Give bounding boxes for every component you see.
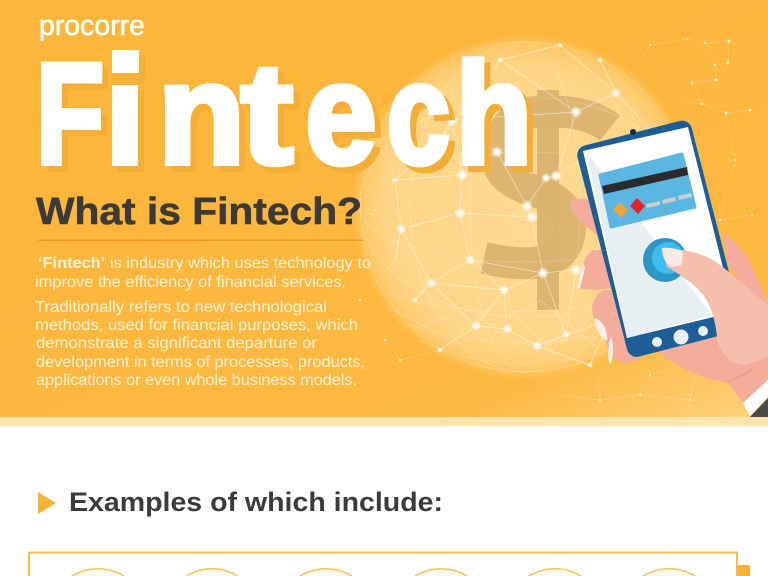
illustration: dollar sign [484, 90, 610, 310]
text block: definition [35, 255, 371, 291]
title: Fintech: i [111, 41, 151, 200]
illustration: thumb [662, 248, 768, 382]
example circles [72, 569, 695, 576]
title: Fintech: n [164, 41, 251, 200]
icon: finger nails [577, 262, 613, 365]
text block: description: applications or even whole business models. [36, 372, 357, 389]
title: Fintech: c [393, 41, 456, 200]
title: Fintech: n [158, 35, 245, 194]
payment card [600, 154, 695, 227]
divider line [38, 240, 363, 241]
panel: hero background [0, 0, 768, 426]
illustration: smartphone [575, 118, 744, 359]
title: Fintech: e [306, 35, 376, 194]
phone camera [630, 129, 636, 135]
text block: definition: improve the efficiency of financial services. [35, 274, 346, 291]
text block: description: methods, used for financial purposes, which [35, 317, 358, 334]
panel: examples box [29, 552, 750, 576]
phone screen [583, 127, 734, 338]
text block: description: development in terms of processes, products, [36, 354, 365, 371]
logo: procorre: procorre [39, 10, 145, 42]
illustration: network globe [353, 35, 754, 402]
text block: definition: ‘Fintech’ is industry which uses technology to [38, 255, 371, 272]
title: Fintech: c [387, 35, 450, 194]
title: Fintech: F [36, 35, 104, 194]
section heading: Examples: Examples of which include: [69, 487, 443, 517]
title: Fintech: F [42, 41, 110, 200]
text block: description [35, 299, 365, 389]
title: Fintech [36, 35, 538, 200]
text block: description: Traditionally refers to new technological [35, 299, 327, 316]
title: Fintech: t [247, 41, 299, 200]
heading: What is Fintech?: What is Fintech? [36, 191, 362, 233]
illustration: hand behind phone [570, 199, 768, 403]
phone screen shade [586, 151, 712, 338]
title: Fintech: t [241, 35, 293, 194]
phone nav dots [652, 326, 708, 347]
title: Fintech: h [456, 35, 532, 194]
text block: description: demonstrate a significant departure or [36, 335, 317, 352]
illustration: shirt cuff and sleeve [743, 380, 768, 417]
title: Fintech: h [462, 41, 538, 200]
phone button [643, 238, 687, 282]
title: Fintech: e [312, 41, 382, 200]
title: Fintech: i [105, 35, 145, 194]
